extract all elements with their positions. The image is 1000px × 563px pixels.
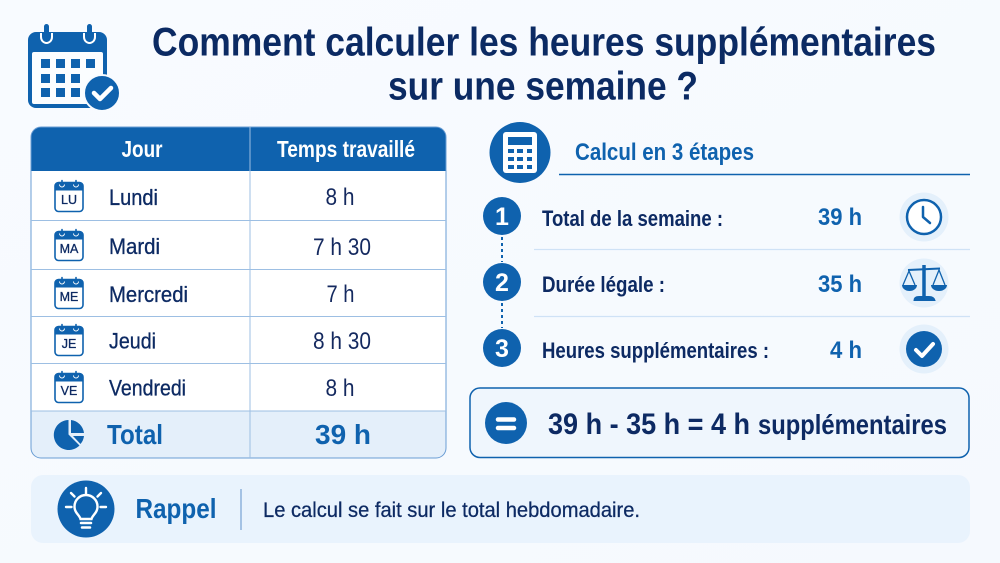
row: Mercredi <box>55 278 354 308</box>
step 3: 3 <box>495 335 509 363</box>
row: Total: 39 h <box>315 419 371 450</box>
step 2: Durée légale : <box>542 272 665 297</box>
step 3 <box>483 324 948 374</box>
row: Lundi <box>55 180 354 212</box>
callout: formula <box>470 388 969 458</box>
row: Total <box>54 419 371 450</box>
row: Jeudi: 8 h 30 <box>313 328 371 355</box>
table header: Temps travaillé <box>277 136 415 162</box>
row: Mardi <box>55 230 371 261</box>
icon: check badge <box>900 324 948 374</box>
row: Jeudi: Jeudi <box>109 328 156 354</box>
row: Mardi: Mardi <box>109 234 160 259</box>
step 1 <box>483 192 948 242</box>
icon: light bulb <box>58 480 114 538</box>
row: Vendredi <box>55 372 354 402</box>
callout: formula: 39 h - 35 h = 4 h <box>548 408 750 441</box>
step 3: Heures supplémentaires : <box>542 338 769 363</box>
row: Mardi: MA <box>60 242 79 256</box>
row: Mercredi: 7 h <box>326 281 354 308</box>
row: Mercredi: Mercredi <box>109 282 188 307</box>
title: sur une semaine ? <box>388 64 698 108</box>
title <box>152 20 936 108</box>
panel header: calcul en 3 étapes: Calcul en 3 étapes <box>575 139 754 166</box>
row: Jeudi: JE <box>62 337 76 351</box>
step 2: 35 h <box>818 271 862 298</box>
panel: rappel: Rappel <box>136 493 216 524</box>
step 1: Total de la semaine : <box>542 206 723 231</box>
step 1: 39 h <box>818 204 862 231</box>
table total row background <box>31 411 446 458</box>
table header: Jour <box>122 136 163 162</box>
step 3: 4 h <box>830 337 862 364</box>
row: Lundi: LU <box>61 193 77 207</box>
row: Jeudi <box>55 324 371 356</box>
row: Mercredi: ME <box>60 290 78 304</box>
row: Vendredi: VE <box>61 384 77 398</box>
table header <box>31 127 446 171</box>
icon: calculator <box>490 122 550 183</box>
icon: pie chart <box>54 420 84 450</box>
row: Total: Total <box>107 419 163 450</box>
step 2 <box>483 258 948 308</box>
row: Lundi: 8 h <box>326 184 354 211</box>
row: Vendredi: 8 h <box>326 375 354 402</box>
panel: rappel: Le calcul se fait sur le total hebdomadaire. <box>263 499 640 522</box>
panel: hours table <box>31 127 446 458</box>
panel: rappel <box>31 475 970 543</box>
callout: formula: supplémentaires <box>758 409 947 440</box>
step 2: 2 <box>495 269 509 297</box>
row: Vendredi: Vendredi <box>109 376 186 400</box>
icon: scales <box>900 258 948 308</box>
step 1: 1 <box>495 203 509 231</box>
panel header: calcul en 3 étapes <box>490 122 970 183</box>
row: Mardi: 7 h 30 <box>313 234 371 261</box>
icon: calendar with check <box>28 26 120 111</box>
icon: clock <box>900 192 948 242</box>
row: Lundi: Lundi <box>109 185 158 210</box>
